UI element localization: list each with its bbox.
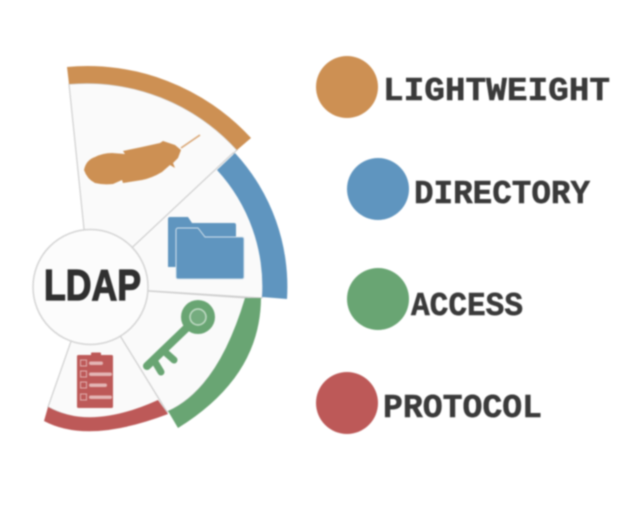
legend item: lightweight: LIGHTWEIGHT [383,73,610,110]
legend item: access: ACCESS [411,288,523,325]
icon: feather [84,135,200,184]
legend item: lightweight [316,56,610,118]
center circle [33,230,148,344]
panel: access sector [90,287,247,412]
icon: key [147,300,215,372]
label: LDAP: LDAP [44,261,141,310]
arc: orange [67,66,251,150]
legend item: protocol: PROTOCOL [383,390,542,427]
legend item: protocol [316,372,542,434]
icon: clipboard checklist [77,352,113,408]
panel: protocol sector [48,287,167,420]
legend item: access [347,268,523,330]
icon: folder [168,217,244,279]
legend item: directory: DIRECTORY [414,176,590,213]
panel: lightweight sector [69,83,237,287]
arc: blue [217,153,287,299]
arc: green [168,298,261,428]
panel: directory sector [90,153,267,298]
legend item: directory [347,158,590,220]
diagram: LDAP radial fan [33,66,287,431]
arc: red [44,400,168,431]
